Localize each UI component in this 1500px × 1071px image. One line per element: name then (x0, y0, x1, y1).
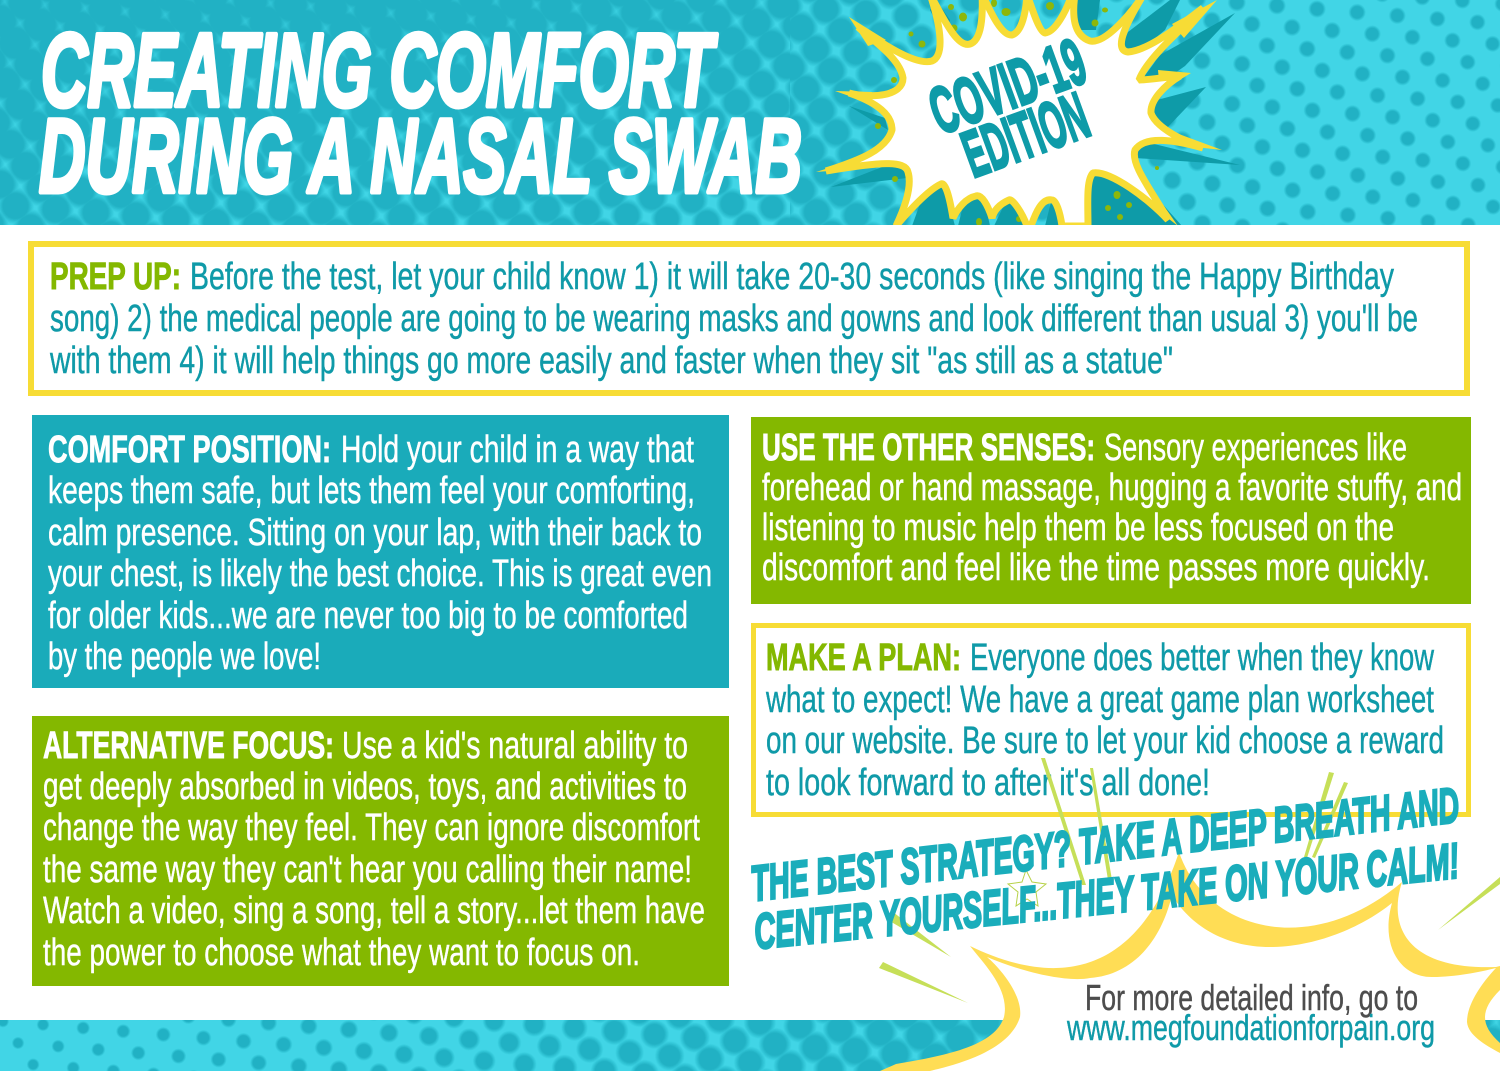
panel: comfort position (32, 415, 729, 688)
header banner (0, 0, 1500, 226)
comfort position text: keeps them safe, but lets them feel your comforting, (48, 470, 695, 512)
burst tips (816, 0, 1222, 226)
comfort position text: COMFORT POSITION: (48, 429, 331, 471)
alternative focus text: change the way they feel. They can ignore discomfort (43, 807, 700, 849)
footer starburst (880, 852, 1500, 1071)
halftone green specks (875, 0, 1159, 226)
footer band (0, 1020, 1500, 1071)
make a plan text: MAKE A PLAN: (766, 637, 961, 679)
alternative focus text: Use a kid's natural ability to (342, 725, 688, 767)
panel: use the other senses (751, 417, 1471, 604)
comfort position text: Hold your child in a way that (341, 429, 694, 471)
starburst badge (816, 0, 1240, 226)
other senses text: USE THE OTHER SENSES: (762, 427, 1095, 469)
make a plan text (765, 637, 1444, 804)
comfort position text: calm presence. Sitting on your lap, with their back to (48, 512, 702, 554)
halftone background: left (0, 0, 790, 225)
alternative focus text: get deeply absorbed in videos, toys, and activities to (43, 766, 687, 808)
alternative focus text (43, 725, 705, 974)
panel: make a plan (754, 626, 1468, 814)
badge text: EDITION (952, 78, 1098, 191)
comfort position text: your chest, is likely the best choice. This is great even (48, 553, 712, 595)
burst shadow wedges (831, 0, 1240, 226)
title: DURING A NASAL SWAB (39, 98, 802, 215)
decorative green rays (879, 758, 1500, 1003)
panel: alternative focus (32, 716, 729, 986)
halftone background: right (790, 0, 1500, 225)
title: CREATING COMFORT (41, 13, 718, 129)
footer link text (1066, 977, 1435, 1048)
alternative focus text: the power to choose what they want to focus on. (43, 932, 640, 974)
comfort position text: for older kids...we are never too big to be comforted (48, 595, 688, 637)
comfort position text (48, 429, 712, 678)
badge text (919, 24, 1098, 191)
prep up text (49, 256, 1418, 382)
comfort position text: by the people we love! (48, 636, 321, 678)
other senses text (762, 427, 1462, 589)
panel: prep up (31, 244, 1467, 393)
alternative focus text: the same way they can't hear you calling their name! (43, 849, 692, 891)
alternative focus text: Watch a video, sing a song, tell a story...let them have (43, 890, 705, 932)
make a plan text: to look forward to after it's all done! (766, 762, 1210, 804)
prep up text: PREP UP: (50, 256, 181, 298)
title (39, 13, 802, 215)
burst shape (826, 0, 1203, 226)
alternative focus text: ALTERNATIVE FOCUS: (43, 725, 334, 767)
